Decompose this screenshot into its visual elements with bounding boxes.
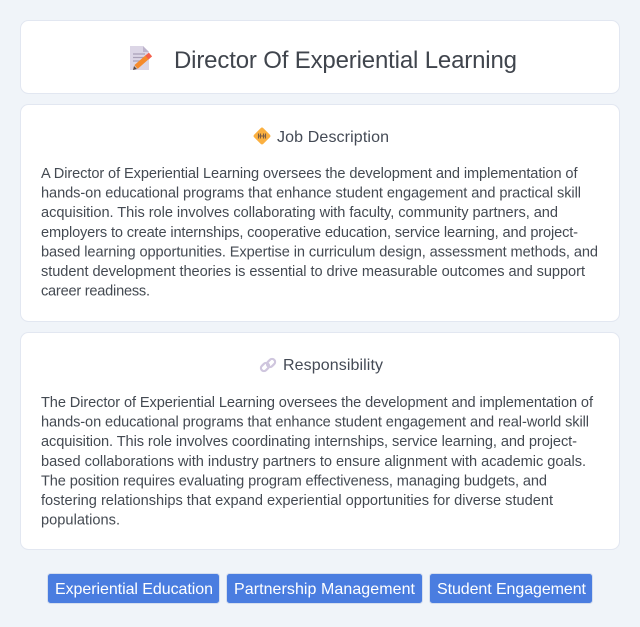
icon: orange diamond <box>253 127 271 145</box>
text block: responsibility <box>41 395 594 529</box>
text block: job description: based learning opportunities. Expertise in curriculum design, assessment methods, and <box>41 244 598 260</box>
panel: job description <box>20 104 620 322</box>
tag: student engagement <box>430 574 592 604</box>
text block: job description: student development theories is essential to drive measurable outcomes and support <box>41 264 585 280</box>
panel: responsibility <box>20 332 620 550</box>
tag: experiential education <box>48 574 220 604</box>
tag: partnership management <box>226 574 422 604</box>
heading: responsibility: Responsibility <box>283 357 383 374</box>
text block: job description: A Director of Experiential Learning oversees the development and implementation of <box>41 166 578 182</box>
tag: student engagement: Student Engagement <box>437 581 587 598</box>
icon: document with pencil <box>130 46 150 70</box>
text block: responsibility: hands-on educational programs that enhance student engagement and real-world skill <box>41 415 589 431</box>
panel: title header <box>20 20 620 94</box>
text block: job description: hands-on educational programs that enhance student engagement and practical skill <box>41 186 581 202</box>
text block: job description: acquisition. This role involves collaborating with faculty, community partners, and <box>41 205 558 221</box>
text block: responsibility: populations. <box>41 513 120 529</box>
text block: job description: employers to create internships, cooperative education, service learning, and project- <box>41 225 578 241</box>
text block: responsibility: acquisition. This role involves coordinating internships, service learning, and project- <box>41 434 577 450</box>
text block: job description: career readiness. <box>41 284 150 300</box>
tag: partnership management: Partnership Management <box>234 581 416 598</box>
text block: responsibility: based collaborations with industry partners to ensure alignment with academic goals. <box>41 454 586 470</box>
icon: chain link <box>260 358 276 372</box>
text block: responsibility: The Director of Experiential Learning oversees the development and implementation of <box>41 395 594 411</box>
text block: responsibility: The position requires evaluating program effectiveness, managing budgets, and <box>41 473 547 489</box>
tag: experiential education: Experiential Education <box>55 581 213 598</box>
title: Director Of Experiential Learning <box>174 47 517 74</box>
heading: job description: Job Description <box>277 129 389 146</box>
text block: responsibility: fostering relationships that expand experiential opportunities for diverse student <box>41 493 553 509</box>
text block: job description <box>41 166 598 300</box>
